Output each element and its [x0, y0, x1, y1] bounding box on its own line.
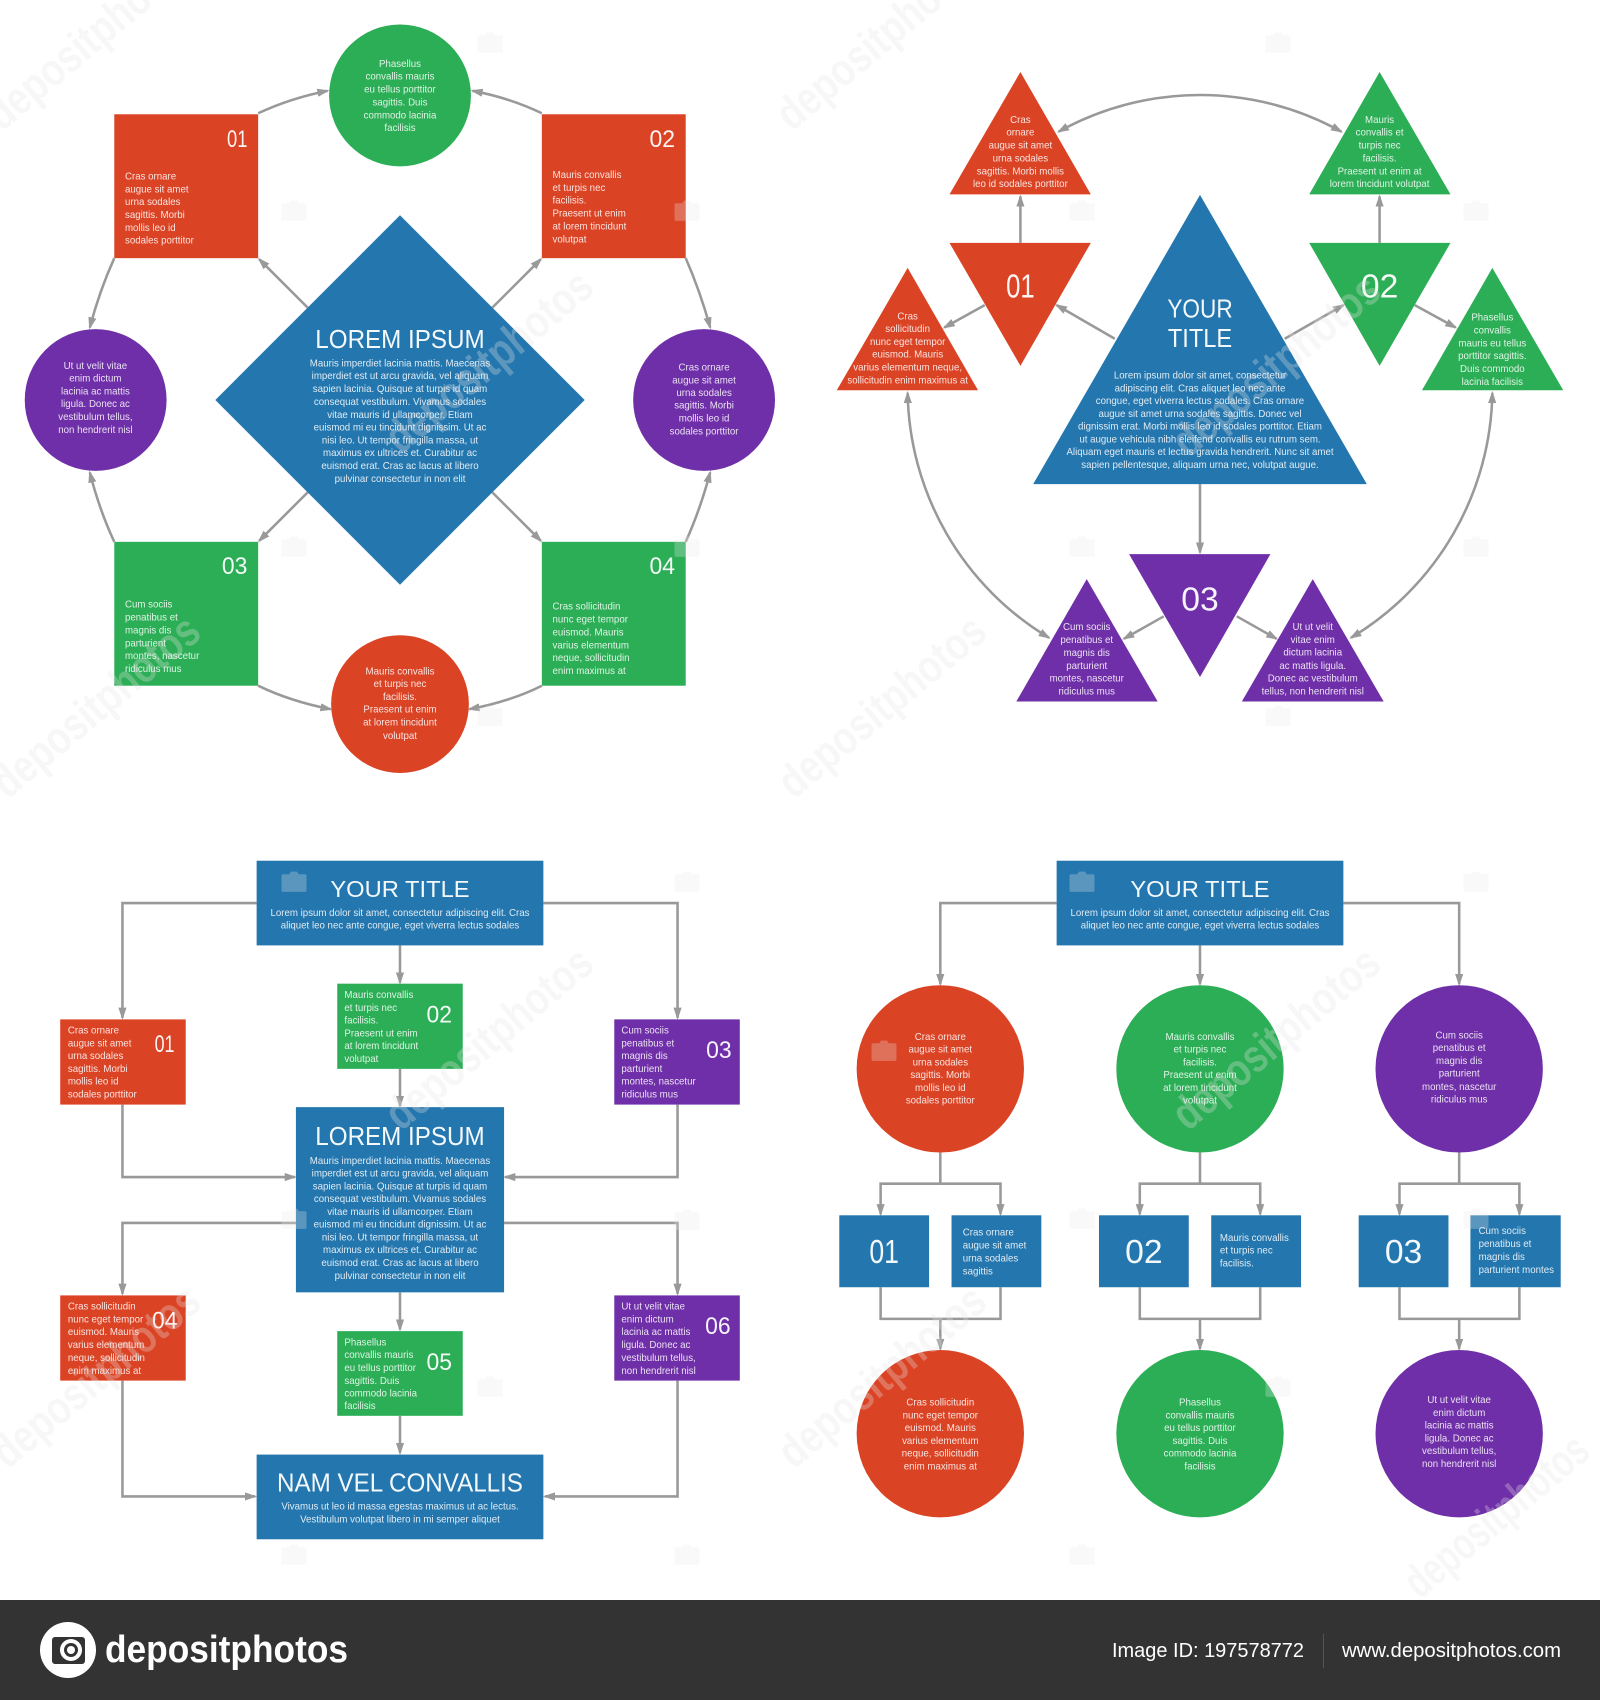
triangle: red top: ornare	[1006, 128, 1034, 139]
box 05: convallis mauris	[344, 1350, 413, 1361]
box 03: parturient	[621, 1064, 663, 1075]
circle: red lower: Cras sollicitudin	[906, 1398, 974, 1409]
center box: Lorem Ipsum: vitae mauris id ullamcorper. Etiam	[327, 1207, 473, 1218]
square 03: Cum sociis	[125, 600, 173, 611]
footer bar	[0, 1600, 1600, 1700]
circle: red upper: mollis leo id	[915, 1083, 966, 1094]
text box 03: Cum sociis	[1479, 1226, 1526, 1237]
circle: left purple: enim dictum	[69, 374, 122, 385]
icon: camera logo	[40, 1622, 96, 1678]
watermark: depositphotos diagonal text: depositphotos	[374, 259, 603, 463]
circle: bottom red: facilisis.	[383, 692, 417, 703]
circle: green lower: convallis mauris	[1166, 1410, 1235, 1421]
square 02	[542, 114, 686, 258]
watermark: depositphotos diagonal text: depositphotos	[1161, 936, 1390, 1140]
center triangle: Your Title: YOUR	[1167, 295, 1233, 323]
box 01	[60, 1019, 186, 1105]
box 02: at lorem tincidunt	[344, 1041, 418, 1052]
number box 02: 02	[1125, 1234, 1163, 1271]
triangle: red top: sagittis. Morbi mollis	[977, 166, 1064, 177]
square 04: euismod. Mauris	[553, 628, 624, 639]
center diamond: Lorem Ipsum: LOREM IPSUM	[315, 326, 485, 354]
text box 01	[952, 1215, 1041, 1287]
circle: bottom red: at lorem tincidunt	[363, 718, 437, 729]
triangle: purple right: tellus, non hendrerit nisl	[1262, 686, 1364, 697]
circle: green upper	[1116, 985, 1284, 1153]
square 02: et turpis nec	[553, 183, 605, 194]
circle: left purple: vestibulum tellus,	[58, 412, 133, 423]
square 02: volutpat	[553, 234, 587, 245]
triangle: purple right: dictum lacinia	[1283, 648, 1343, 659]
box 01: 01	[155, 1031, 174, 1058]
footer box: Nam Vel Convallis: Vivamus ut leo id massa egestas maximus ut ac lectus.	[281, 1502, 519, 1513]
box 06: lacinia ac mattis	[621, 1327, 690, 1338]
text box 03: penatibus et	[1479, 1239, 1532, 1250]
square 04: varius elementum	[553, 640, 629, 651]
panel: rectangular flowchart	[60, 861, 740, 1539]
triangle: purple left: parturient	[1066, 661, 1107, 672]
triangle: purple left: penatibus et	[1060, 635, 1113, 646]
center triangle: Your Title: augue sit amet urna sodales sagittis. Donec vel	[1098, 409, 1302, 420]
circle: green lower	[1116, 1350, 1284, 1517]
website: www.depositphotos.com	[1341, 1640, 1561, 1662]
square 02: 02	[649, 126, 675, 153]
box 01: augue sit amet	[68, 1038, 132, 1049]
center box: Lorem Ipsum: pulvinar consectetur in non elit	[335, 1271, 466, 1282]
circle: green lower: eu tellus porttitor	[1164, 1423, 1237, 1434]
circle: purple upper: Cum sociis	[1435, 1030, 1483, 1041]
square 01: mollis leo id	[125, 223, 176, 234]
center diamond: Lorem Ipsum: euismod mi eu tincidunt dignissim. Ut ac	[314, 423, 487, 434]
box 04: enim maximus at	[68, 1366, 141, 1377]
text box 02: et turpis nec	[1220, 1246, 1273, 1257]
circle: green upper: Praesent ut enim	[1163, 1070, 1237, 1081]
text box 03: parturient montes	[1479, 1265, 1554, 1276]
triangle: purple right: ac mattis ligula.	[1279, 661, 1346, 672]
center box: Lorem Ipsum: maximus ex ultrices et. Curabitur ac	[323, 1245, 477, 1256]
box 04	[60, 1295, 186, 1381]
circle: right purple: sagittis. Morbi	[674, 401, 734, 412]
triangle: red left	[837, 268, 978, 390]
box 06: non hendrerit nisl	[621, 1366, 696, 1377]
watermark: depositphotos diagonal text: depositphotos	[374, 936, 603, 1140]
center triangle: Your Title: TITLE	[1168, 325, 1232, 353]
circle: top green: commodo lacinia	[364, 110, 437, 121]
box 03: 03	[706, 1037, 732, 1064]
circle: red upper: urna sodales	[913, 1057, 968, 1068]
watermark: camera icons	[282, 33, 1488, 1565]
inverted triangle 03: 03	[1181, 582, 1219, 619]
watermark: depositphotos diagonal text: depositphotos	[767, 604, 996, 808]
box 04: Cras sollicitudin	[68, 1302, 136, 1313]
circle: top green: convallis mauris	[366, 72, 435, 83]
square 02: at lorem tincidunt	[553, 222, 627, 233]
triangle: red top: leo id sodales porttitor	[973, 179, 1069, 190]
box 01: mollis leo id	[68, 1077, 118, 1088]
square 01	[114, 114, 258, 258]
number box 03: 03	[1385, 1234, 1422, 1271]
box 03: magnis dis	[621, 1051, 668, 1062]
circle: purple upper: magnis dis	[1436, 1056, 1482, 1067]
circle: purple upper: montes, nascetur	[1422, 1082, 1497, 1093]
box 02: 02	[427, 1001, 452, 1028]
circle: red upper: sagittis. Morbi	[910, 1070, 970, 1081]
circle: red lower: enim maximus at	[904, 1461, 977, 1472]
center triangle: Your Title: Aliquam eget mauris et lectus gravida hendrerit. Nunc sit amet	[1066, 447, 1334, 458]
circle: green upper: volutpat	[1183, 1096, 1217, 1107]
square 01: augue sit amet	[125, 184, 189, 195]
square 04	[542, 542, 686, 686]
arrows: cycle and diamond connectors	[90, 91, 710, 709]
panel: three-column tree diagram	[839, 861, 1561, 1517]
triangle: green right: Phasellus	[1471, 312, 1513, 323]
circle: purple upper	[1376, 985, 1543, 1153]
triangle: green right: mauris eu tellus	[1458, 338, 1526, 349]
circle: left purple: lacinia ac mattis	[61, 386, 130, 397]
number box 01	[839, 1215, 929, 1287]
circle: green lower: facilisis	[1184, 1461, 1216, 1472]
circle: green upper: facilisis.	[1183, 1057, 1217, 1068]
center triangle: Your Title: Lorem ipsum dolor sit amet, consectetur	[1114, 371, 1287, 382]
triangle: green right: Duis commodo	[1460, 364, 1525, 375]
text box 03	[1470, 1215, 1561, 1287]
box 02: et turpis nec	[344, 1003, 397, 1014]
box 05: 05	[427, 1349, 452, 1376]
box 03: montes, nascetur	[621, 1077, 697, 1088]
triangle: purple left: montes, nascetur	[1050, 674, 1125, 685]
inverted triangle 02	[1309, 243, 1451, 366]
circle: right purple: urna sodales	[676, 388, 732, 399]
number box 03	[1359, 1215, 1448, 1287]
text box 01: augue sit amet	[963, 1240, 1027, 1251]
image id: Image ID: 197578772	[1112, 1640, 1304, 1662]
box 05: commodo lacinia	[344, 1388, 418, 1399]
text box 01: urna sodales	[963, 1254, 1018, 1265]
text box 02: facilisis.	[1220, 1258, 1254, 1269]
triangle: purple left: Cum sociis	[1063, 622, 1111, 633]
circle: top green: facilisis	[384, 123, 416, 134]
circle: purple lower	[1376, 1350, 1543, 1517]
triangle: purple left	[1016, 579, 1158, 702]
square 04: neque, sollicitudin	[553, 653, 630, 664]
square 01: 01	[227, 126, 247, 153]
circle: red lower	[857, 1350, 1024, 1517]
circle: top green	[329, 24, 471, 166]
triangle: purple left: ridiculus mus	[1058, 686, 1115, 697]
square 02: Mauris convallis	[553, 170, 622, 181]
circle: green lower: Phasellus	[1179, 1398, 1221, 1409]
box 06	[614, 1295, 740, 1381]
number box 02	[1099, 1215, 1189, 1287]
box 02: Praesent ut enim	[344, 1029, 418, 1040]
center diamond: Lorem Ipsum: euismod erat. Cras ac lacus at libero	[321, 461, 479, 472]
center diamond: Lorem Ipsum: pulvinar consectetur in non elit	[335, 474, 466, 485]
center triangle: Your Title: dignissim erat. Morbi mollis leo id sodales porttitor. Etiam	[1078, 422, 1322, 433]
circle: purple upper: parturient	[1439, 1069, 1480, 1080]
square 03	[114, 542, 258, 686]
box 02: volutpat	[344, 1054, 379, 1065]
box 01: urna sodales	[68, 1051, 123, 1062]
center diamond: Lorem Ipsum: Mauris imperdiet lacinia mattis. Maecenas	[310, 358, 490, 369]
box 06: enim dictum	[621, 1314, 674, 1325]
circle: bottom red: Praesent ut enim	[363, 705, 437, 716]
header box: Your Title	[1057, 861, 1343, 945]
circle: purple upper: penatibus et	[1433, 1043, 1486, 1054]
circle: green upper: et turpis nec	[1174, 1045, 1227, 1056]
triangle: green right: porttitor sagittis.	[1458, 351, 1527, 362]
box 04: 04	[152, 1308, 178, 1335]
square 01: sagittis. Morbi	[125, 210, 185, 221]
circle: purple lower: non hendrerit nisl	[1422, 1459, 1496, 1470]
triangle: purple right	[1242, 579, 1384, 702]
box 04: nunc eget tempor	[68, 1314, 144, 1325]
center triangle: Your Title: sapien pellentesque, aliquam urna nec, volutpat augue.	[1081, 460, 1319, 471]
center box: Lorem Ipsum	[296, 1107, 504, 1292]
square 03: ridiculus mus	[125, 664, 182, 675]
square 01: urna sodales	[125, 197, 181, 208]
center triangle: Your Title: congue, eget viverra lectus sodales. Cras ornare	[1096, 396, 1304, 407]
circle: purple lower: lacinia ac mattis	[1425, 1421, 1494, 1432]
center box: Lorem Ipsum: sapien lacinia. Quisque at turpis id quam	[313, 1181, 487, 1192]
circle: green upper: at lorem tincidunt	[1163, 1083, 1237, 1094]
circle: left purple: Ut ut velit vitae	[64, 361, 127, 372]
square 04: enim maximus at	[553, 666, 626, 677]
square 04: 04	[649, 553, 675, 580]
center diamond: Lorem Ipsum	[215, 215, 585, 585]
center box: Lorem Ipsum: LOREM IPSUM	[315, 1123, 485, 1151]
panel: diamond cycle diagram	[25, 24, 775, 773]
triangle: green top	[1309, 72, 1451, 194]
square 03: penatibus et	[125, 612, 178, 623]
box 02	[337, 984, 463, 1069]
box 05: eu tellus porttitor	[344, 1363, 417, 1374]
text box 01: Cras ornare	[963, 1228, 1014, 1239]
header box: Your Title	[257, 861, 543, 945]
inverted triangle 02: 02	[1361, 268, 1398, 305]
center triangle: Your Title: adipiscing elit. Cras aliquet leo nec ante	[1115, 383, 1285, 394]
arrows: flowchart connectors	[122, 903, 678, 1496]
square 03: montes, nascetur	[125, 651, 200, 662]
text box 01: sagittis	[963, 1266, 993, 1277]
circle: red lower: neque, sollicitudin	[902, 1449, 979, 1460]
circle: right purple: Cras ornare	[678, 362, 730, 373]
box 05: sagittis. Duis	[344, 1376, 399, 1387]
triangle: red top: augue sit amet	[989, 140, 1052, 151]
triangle: purple right: Ut ut velit	[1293, 622, 1333, 633]
circle: purple lower: enim dictum	[1433, 1408, 1485, 1419]
circle: purple lower: ligula. Donec ac	[1425, 1433, 1494, 1444]
center diamond: Lorem Ipsum: sapien lacinia. Quisque at turpis id quam	[313, 384, 487, 395]
box 03: ridiculus mus	[621, 1089, 678, 1100]
box 02: Mauris convallis	[344, 990, 413, 1001]
square 04: Cras sollicitudin	[553, 602, 620, 613]
inverted triangle 01: 01	[1006, 268, 1035, 305]
triangle: green top: facilisis.	[1363, 154, 1397, 165]
box 05: facilisis	[344, 1401, 376, 1412]
circle: right purple: mollis leo id	[679, 413, 729, 424]
box 06: Ut ut velit vitae	[621, 1302, 685, 1313]
circle: red upper: augue sit amet	[909, 1045, 972, 1056]
circle: bottom red: Mauris convallis	[366, 666, 435, 677]
triangle: red left: varius elementum neque,	[853, 362, 962, 373]
triangle: green top: Mauris	[1365, 115, 1394, 126]
text box 03: magnis dis	[1479, 1252, 1525, 1263]
box 01: sodales porttitor	[68, 1089, 138, 1100]
triangle: purple left: magnis dis	[1064, 648, 1110, 659]
inverted triangle 01	[949, 243, 1091, 366]
box 04: varius elementum	[68, 1340, 144, 1351]
triangle: green top: lorem tincidunt volutpat	[1330, 179, 1430, 190]
box 04: euismod. Mauris	[68, 1327, 139, 1338]
triangle: green top: turpis nec	[1359, 140, 1401, 151]
circle: top green: sagittis. Duis	[373, 98, 428, 109]
circle: top green: eu tellus porttitor	[364, 84, 437, 95]
center diamond: Lorem Ipsum: consequat vestibulum. Vivamus sodales	[314, 397, 486, 408]
circle: top green: Phasellus	[379, 59, 421, 70]
circle: bottom red: et turpis nec	[374, 679, 427, 690]
footer box: Nam Vel Convallis: Vestibulum volutpat libero in mi semper aliquet	[300, 1514, 500, 1525]
triangle: green right: convallis	[1474, 326, 1511, 337]
triangle: green right: lacinia facilisis	[1462, 377, 1523, 388]
triangle: red top: urna sodales	[993, 154, 1048, 165]
circle: left purple	[25, 329, 167, 471]
triangle: red top	[949, 72, 1091, 194]
text box 02	[1211, 1215, 1301, 1287]
center triangle: Your Title: ut augue vehicula nibh eleifend convallis eu rutrum sem.	[1079, 434, 1321, 445]
center box: Lorem Ipsum: imperdiet est ut arcu gravida, vel aliquam	[312, 1169, 488, 1180]
logo text: depositphotos	[105, 1629, 348, 1671]
triangle: red left: euismod. Mauris	[872, 350, 943, 361]
separator	[1323, 1634, 1324, 1668]
center box: Lorem Ipsum: Mauris imperdiet lacinia mattis. Maecenas	[310, 1156, 490, 1167]
circle: red lower: varius elementum	[902, 1436, 979, 1447]
box 05: Phasellus	[344, 1337, 387, 1348]
circle: purple upper: ridiculus mus	[1431, 1095, 1488, 1106]
square 03: magnis dis	[125, 626, 171, 637]
square 01: Cras ornare	[125, 172, 176, 183]
watermark: depositphotos diagonal text: depositphotos	[1161, 263, 1390, 467]
circle: right purple: augue sit amet	[672, 376, 736, 387]
circle: purple lower: vestibulum tellus,	[1422, 1446, 1496, 1457]
triangle: purple right: Donec ac vestibulum	[1268, 674, 1358, 685]
box 06: ligula. Donec ac	[621, 1340, 691, 1351]
header box: Your Title: aliquet leo nec ante congue, eget viverra lectus sodales	[281, 921, 519, 932]
circle: left purple: ligula. Donec ac	[61, 399, 130, 410]
center box: Lorem Ipsum: consequat vestibulum. Vivamus sodales	[314, 1194, 486, 1205]
circle: purple lower: Ut ut velit vitae	[1427, 1395, 1491, 1406]
triangle: red left: sollicitudin enim maximus at	[847, 376, 968, 387]
square 03: parturient	[125, 638, 166, 649]
circle: red upper	[857, 985, 1024, 1153]
square 02: Praesent ut enim	[553, 208, 626, 219]
box 06: 06	[705, 1313, 731, 1340]
number box 01: 01	[869, 1234, 899, 1271]
header box: Your Title: YOUR TITLE	[1130, 876, 1270, 902]
center box: Lorem Ipsum: euismod mi eu tincidunt dignissim. Ut ac	[314, 1220, 487, 1231]
box 01: sagittis. Morbi	[68, 1064, 128, 1075]
triangle: red left: Cras	[897, 311, 918, 322]
circle: right purple	[633, 329, 775, 471]
header box: Your Title: YOUR TITLE	[330, 876, 470, 902]
center box: Lorem Ipsum: nisi leo. Ut tempor fringilla massa, ut	[322, 1232, 478, 1243]
text box 02: Mauris convallis	[1220, 1233, 1289, 1244]
triangle: purple right: vitae enim	[1291, 635, 1335, 646]
center triangle: Your Title	[1033, 195, 1367, 484]
circle: green lower: sagittis. Duis	[1173, 1436, 1228, 1447]
square 01: sodales porttitor	[125, 235, 195, 246]
watermark: depositphotos diagonal text: depositphotos	[767, 1274, 996, 1478]
inverted triangle 03	[1129, 554, 1270, 677]
circle: bottom red	[331, 635, 469, 773]
triangle: green top: convallis et	[1356, 128, 1404, 139]
triangle: green top: Praesent ut enim at	[1338, 166, 1422, 177]
footer box: Nam Vel Convallis	[257, 1455, 543, 1539]
header box: Your Title: Lorem ipsum dolor sit amet, consectetur adipiscing elit. Cras	[1071, 908, 1330, 919]
square 02: facilisis.	[553, 196, 586, 207]
square 04: nunc eget tempor	[553, 614, 629, 625]
circle: left purple: non hendrerit nisl	[58, 425, 133, 436]
box 03: Cum sociis	[621, 1026, 669, 1037]
triangle: red left: sollicitudin	[885, 324, 930, 335]
box 01: Cras ornare	[68, 1026, 119, 1037]
panel: triangle cycle diagram	[837, 72, 1563, 702]
circle: green lower: commodo lacinia	[1164, 1449, 1237, 1460]
center diamond: Lorem Ipsum: imperdiet est ut arcu gravida, vel aliquam	[312, 371, 488, 382]
box 05	[337, 1331, 463, 1416]
arrows: tree connectors	[881, 903, 1519, 1349]
square 03: 03	[222, 553, 247, 580]
circle: bottom red: volutpat	[383, 731, 417, 742]
box 03	[614, 1019, 740, 1105]
triangle: green right	[1422, 268, 1563, 390]
center diamond: Lorem Ipsum: vitae mauris id ullamcorper. Etiam	[327, 410, 473, 421]
circle: red upper: Cras ornare	[915, 1032, 966, 1043]
footer box: Nam Vel Convallis: NAM VEL CONVALLIS	[277, 1469, 523, 1497]
arrows: arcs and triangle connectors	[908, 95, 1492, 639]
circle: red upper: sodales porttitor	[906, 1096, 976, 1107]
center diamond: Lorem Ipsum: nisi leo. Ut tempor fringilla massa, ut	[322, 435, 478, 446]
center diamond: Lorem Ipsum: maximus ex ultrices et. Curabitur ac	[323, 448, 477, 459]
circle: red lower: euismod. Mauris	[905, 1423, 976, 1434]
circle: right purple: sodales porttitor	[670, 427, 739, 438]
triangle: red top: Cras	[1010, 115, 1031, 126]
box 02: facilisis.	[344, 1015, 378, 1026]
circle: red lower: nunc eget tempor	[903, 1410, 979, 1421]
box 04: neque, sollicitudin	[68, 1353, 145, 1364]
center box: Lorem Ipsum: euismod erat. Cras ac lacus at libero	[321, 1258, 479, 1269]
header box: Your Title: Lorem ipsum dolor sit amet, consectetur adipiscing elit. Cras	[271, 908, 530, 919]
triangle: red left: nunc eget tempor	[870, 337, 946, 348]
circle: green upper: Mauris convallis	[1166, 1032, 1235, 1043]
header box: Your Title: aliquet leo nec ante congue, eget viverra lectus sodales	[1081, 921, 1319, 932]
box 06: vestibulum tellus,	[621, 1353, 696, 1364]
box 03: penatibus et	[621, 1038, 675, 1049]
